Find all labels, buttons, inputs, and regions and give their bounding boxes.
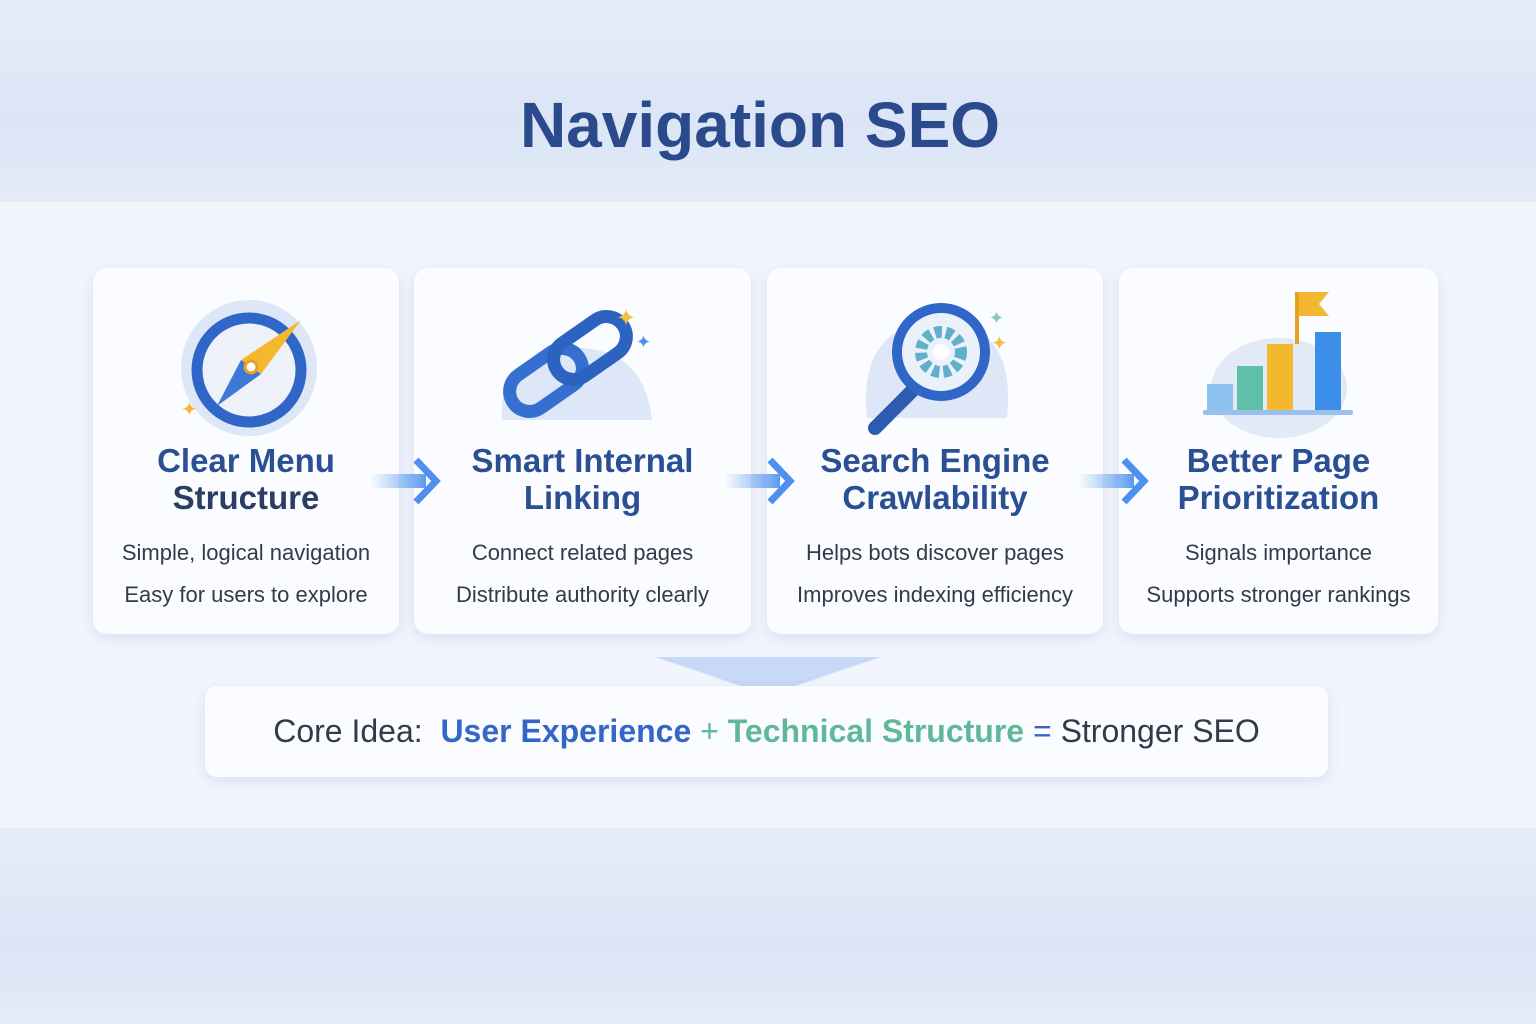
icon: compass: ✦ <box>181 399 198 421</box>
card 4: prioritization: Better Page <box>1187 442 1370 479</box>
core idea box <box>205 686 1328 777</box>
icon: chain link <box>502 305 652 420</box>
icon: compass <box>181 300 317 436</box>
card 2: internal linking: Linking <box>524 479 641 516</box>
icon: magnifier with gear <box>866 303 1008 435</box>
core idea box: Core Idea: User Experience + Technical Structure = Stronger SEO <box>273 713 1260 749</box>
card 2: internal linking: Connect related pages <box>472 540 693 565</box>
card 1: clear menu: Easy for users to explore <box>124 582 368 607</box>
icon: magnifier with gear: ✦ <box>989 308 1004 328</box>
title: Navigation SEO <box>520 89 1000 161</box>
background top band <box>0 0 1536 202</box>
card 1: clear menu: Clear Menu <box>157 442 335 479</box>
card 4: prioritization: Signals importance <box>1185 540 1372 565</box>
icon: chain link: ✦ <box>616 305 636 332</box>
down arrow <box>656 657 880 686</box>
card 3: crawlability: Crawlability <box>842 479 1028 516</box>
card 4: prioritization <box>1119 268 1438 634</box>
card 2: internal linking: Smart Internal <box>472 442 693 479</box>
card 3: crawlability: Search Engine <box>820 442 1050 479</box>
card 4: prioritization: Supports stronger rankings <box>1146 582 1411 607</box>
card 1: clear menu: Structure <box>173 479 319 516</box>
card 3: crawlability: Improves indexing efficiency <box>797 582 1073 607</box>
icon: bar chart with flag <box>1203 292 1353 438</box>
card 1: clear menu <box>93 268 399 634</box>
icon: magnifier with gear: ✦ <box>991 333 1008 355</box>
icon: chain link: ✦ <box>636 332 651 352</box>
card 2: internal linking: Distribute authority clearly <box>456 582 709 607</box>
card 1: clear menu: Simple, logical navigation <box>122 540 370 565</box>
arrow 1 <box>373 458 441 504</box>
arrow 3 <box>1081 458 1149 504</box>
card 4: prioritization: Prioritization <box>1178 479 1379 516</box>
card 3: crawlability: Helps bots discover pages <box>806 540 1064 565</box>
card 2: internal linking <box>414 268 751 634</box>
arrow 2 <box>727 458 795 504</box>
card 3: crawlability <box>767 268 1103 634</box>
background bottom band <box>0 828 1536 1024</box>
